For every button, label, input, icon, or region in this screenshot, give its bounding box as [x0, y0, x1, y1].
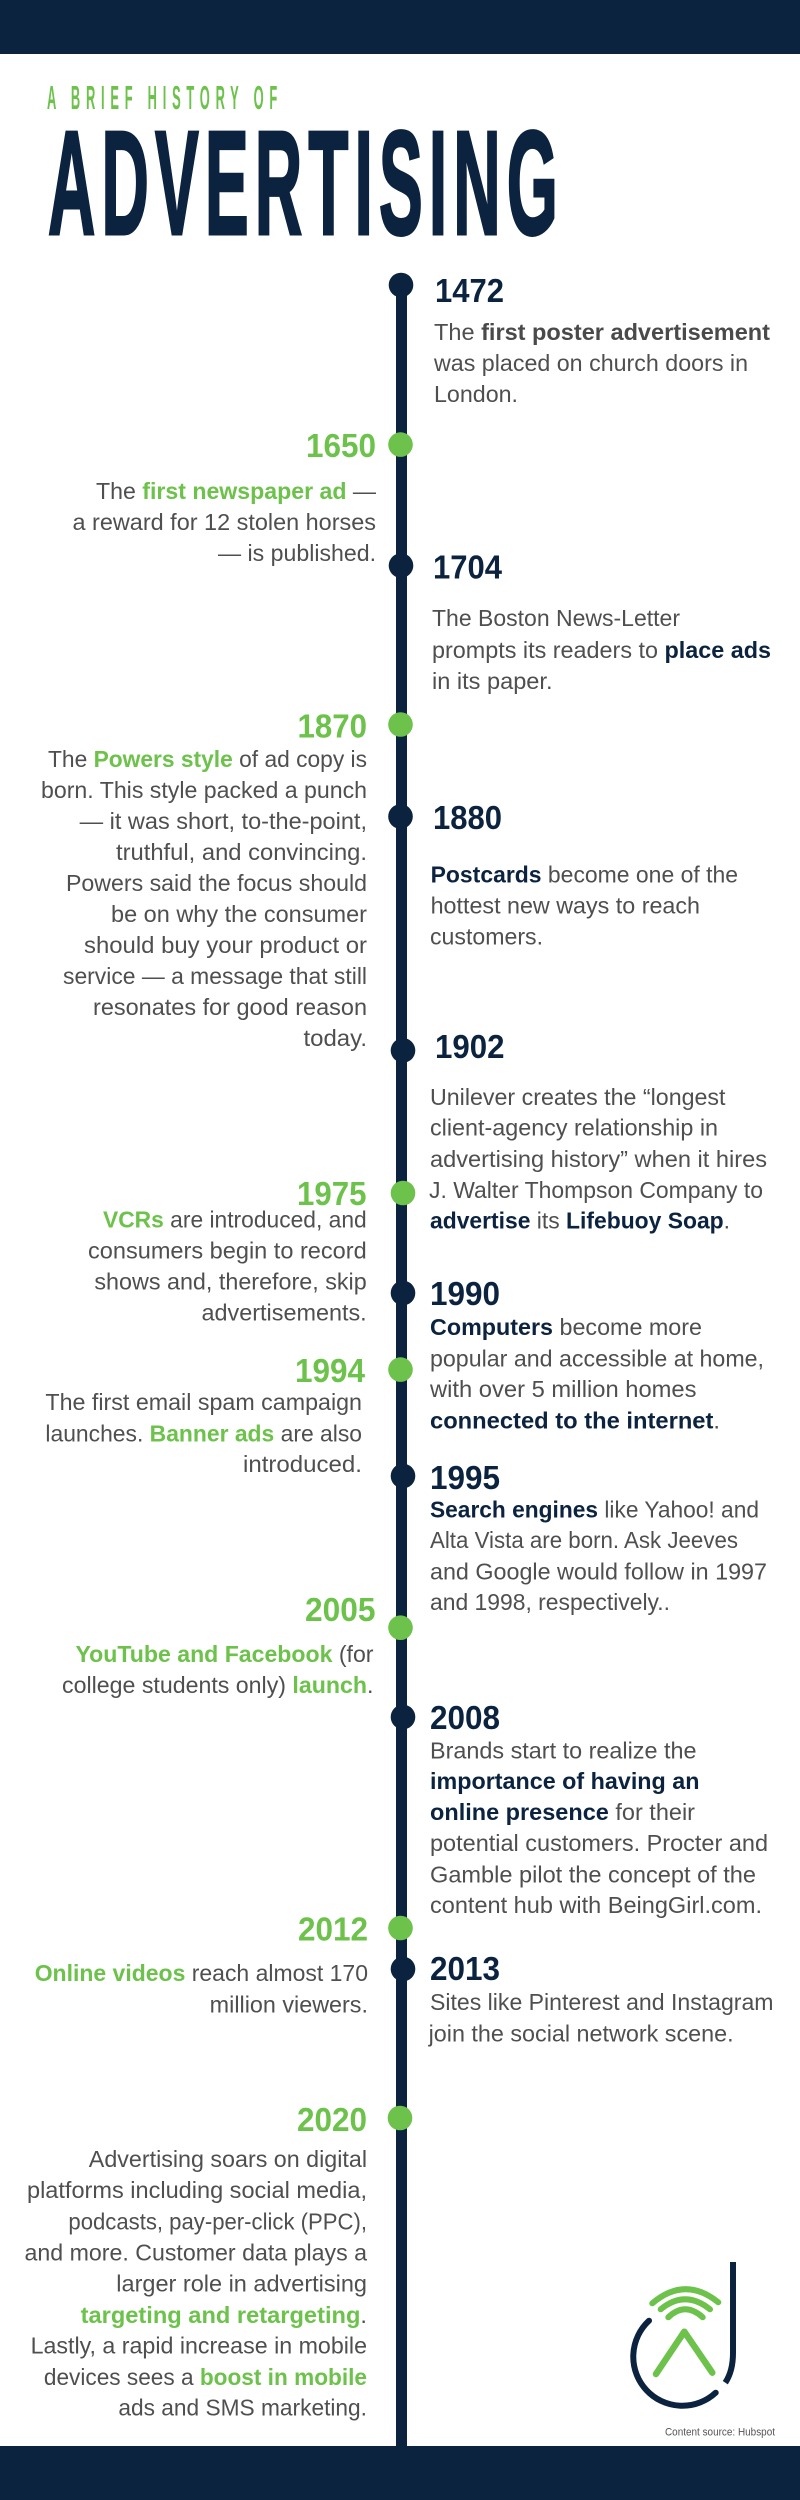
text: 1472: [433, 319, 770, 407]
text: 1704: The Boston News-Letter: [432, 605, 680, 631]
text: 1902: advertising history” when it hires: [430, 1146, 767, 1172]
marker: 1975: [391, 1181, 415, 1205]
text: 1870: The Powers style of ad copy is: [48, 746, 367, 772]
text: 2008: content hub with BeingGirl.com.: [430, 1892, 762, 1918]
marker: 2013: [391, 1957, 415, 1981]
text: 1995: and 1998, respectively..: [430, 1589, 670, 1615]
year: 1995: 1995: [430, 1459, 500, 1496]
text: 1870: today.: [304, 1025, 367, 1051]
text: 1990: popular and accessible at home,: [430, 1346, 764, 1372]
text: 1650: — is published.: [218, 540, 376, 566]
text: 1975: consumers begin to record: [88, 1238, 367, 1264]
text: 2020: [24, 2146, 367, 2421]
text: 2008: [430, 1738, 768, 1918]
text: 1870: should buy your product or: [84, 932, 367, 958]
text: 1870: born. This style packed a punch: [41, 777, 367, 803]
timeline entry: 1650: [72, 427, 413, 566]
text: 1902: J. Walter Thompson Company to: [429, 1177, 763, 1203]
marker: 1880: [388, 804, 413, 829]
timeline entry: 1880: [388, 799, 738, 950]
text: 1472: London.: [434, 381, 518, 407]
year: 1902: 1902: [435, 1028, 504, 1065]
text: 2013: [428, 1989, 774, 2046]
marker: 1704: [389, 553, 413, 578]
text: 2012: Online videos reach almost 170: [35, 1960, 368, 1986]
marker: 1650: [388, 432, 413, 457]
text: 2012: [35, 1960, 368, 2018]
year: 1994: 1994: [295, 1352, 366, 1389]
text: 2020: larger role in advertising: [116, 2270, 367, 2296]
timeline entry: 1902: [391, 1028, 767, 1234]
marker: 1870: [388, 712, 413, 737]
text: 1990: connected to the internet .: [430, 1408, 720, 1434]
text: 2020: and more. Customer data plays a: [24, 2240, 367, 2266]
text: 1870: Powers said the focus should: [66, 870, 367, 896]
text: 1994: The first email spam campaign: [45, 1389, 362, 1415]
text: 2013: Sites like Pinterest and Instagram: [430, 1989, 774, 2015]
timeline entry: 1472: [389, 272, 770, 407]
top band: [0, 0, 800, 54]
year: 1880: 1880: [433, 799, 502, 836]
text: 2013: join the social network scene.: [428, 2020, 734, 2046]
year: 1472: 1472: [435, 272, 504, 309]
marker: 1902: [391, 1038, 415, 1063]
text: 1870: resonates for good reason: [93, 994, 367, 1020]
text: 2008: online presence for their: [430, 1799, 695, 1825]
text: 1995: Search engines like Yahoo! and: [430, 1496, 759, 1522]
text: A BRIEF HISTORY OF: [47, 80, 283, 117]
text: 1650: The first newspaper ad —: [96, 478, 376, 504]
year: 2005: 2005: [305, 1591, 376, 1628]
text: 1995: [430, 1496, 767, 1615]
bottom band: [0, 2446, 800, 2500]
text: 1880: Postcards become one of the: [431, 862, 738, 888]
text: 1902: client-agency relationship in: [430, 1115, 718, 1141]
source credit: Content source: Hubspot: [665, 2427, 775, 2439]
text: 1880: customers.: [430, 924, 543, 950]
text: 2020: Lastly, a rapid increase in mobile: [31, 2333, 367, 2359]
text: 1990: Computers become more: [430, 1314, 702, 1340]
timeline entry: 2005: [62, 1591, 413, 1698]
timeline entry: 1995: [391, 1459, 767, 1615]
text: 2020: targeting and retargeting .: [81, 2302, 367, 2328]
marker: 2020: [388, 2106, 412, 2130]
marker: 1995: [391, 1464, 415, 1488]
text: 1994: launches. Banner ads are also: [45, 1420, 362, 1446]
timeline entry: 1975: [88, 1175, 415, 1326]
text: 1880: hottest new ways to reach: [431, 892, 700, 918]
timeline spine: [396, 285, 407, 2446]
text: 1704: prompts its readers to place ads: [432, 637, 771, 663]
year: 1870: 1870: [298, 708, 367, 744]
text: 2008: Gamble pilot the concept of the: [430, 1862, 756, 1888]
marker: 2012: [388, 1916, 413, 1940]
text: 1472: The first poster advertisement: [434, 319, 770, 345]
year: 2020: 2020: [297, 2101, 367, 2138]
text: 1902: Unilever creates the “longest: [430, 1084, 726, 1110]
text: 2005: YouTube and Facebook (for: [76, 1641, 374, 1667]
text: 1870: truthful, and convincing.: [116, 839, 367, 865]
text: 1650: [72, 478, 376, 566]
text: 1902: advertise its Lifebuoy Soap.: [430, 1208, 730, 1234]
timeline entry: 2012: [35, 1911, 413, 2018]
text: 2020: Advertising soars on digital: [89, 2146, 367, 2172]
text: 1704: [432, 605, 771, 694]
logo: [633, 2262, 733, 2406]
text: 1880: [430, 862, 738, 950]
text: 1870: be on why the consumer: [111, 901, 367, 927]
text: 1704: in its paper.: [432, 668, 552, 694]
year: 1990: 1990: [430, 1275, 500, 1312]
year: 2012: 2012: [298, 1911, 368, 1948]
text: 2020: ads and SMS marketing.: [118, 2395, 367, 2421]
marker: 1472: [389, 273, 413, 297]
text: 1975: VCRs are introduced, and: [103, 1207, 367, 1233]
text: 1650: a reward for 12 stolen horses: [72, 509, 376, 535]
timeline entry: 2020: [24, 2101, 412, 2421]
text: 1870: — it was short, to-the-point,: [80, 808, 367, 834]
text: 2020: devices sees a boost in mobile: [44, 2364, 367, 2390]
text: 2005: college students only) launch.: [62, 1672, 374, 1698]
text: 1995: Alta Vista are born. Ask Jeeves: [430, 1527, 738, 1553]
year: 1704: 1704: [433, 549, 503, 586]
text: 1990: [429, 1314, 764, 1434]
marker: 1994: [388, 1357, 413, 1382]
text: 1995: and Google would follow in 1997: [430, 1558, 767, 1584]
text: 2012: million viewers.: [210, 1992, 368, 2018]
timeline entry: 1994: [45, 1352, 413, 1477]
text: 2020: platforms including social media,: [27, 2177, 367, 2203]
text: 1870: service — a message that still: [63, 963, 367, 989]
year: 2008: 2008: [430, 1699, 500, 1736]
text: 2008: potential customers. Procter and: [430, 1830, 768, 1856]
timeline entry: 2008: [391, 1699, 768, 1918]
text: 1975: [88, 1207, 367, 1326]
marker: 2005: [388, 1615, 413, 1640]
text: 1870: [41, 746, 367, 1051]
timeline entry: 2013: [391, 1950, 774, 2046]
marker: 1990: [391, 1281, 415, 1305]
text: 1902: [429, 1084, 767, 1234]
marker: 2008: [391, 1705, 415, 1729]
year: 2013: 2013: [430, 1950, 500, 1987]
year: 1650: 1650: [306, 427, 376, 464]
text: 1994: [45, 1389, 362, 1477]
text: 2008: importance of having an: [430, 1768, 700, 1794]
year: 1975: 1975: [297, 1175, 366, 1212]
text: 1975: advertisements.: [202, 1300, 367, 1326]
text: 2020: podcasts, pay-per-click (PPC),: [68, 2208, 367, 2234]
text: 1990: with over 5 million homes: [429, 1376, 696, 1402]
text: 1472: was placed on church doors in: [433, 350, 748, 376]
timeline entry: 1704: [389, 549, 771, 694]
text: 2008: Brands start to realize the: [430, 1738, 696, 1764]
text: 1975: shows and, therefore, skip: [94, 1269, 367, 1295]
text: 1994: introduced.: [243, 1451, 362, 1477]
timeline entry: 1870: [41, 708, 413, 1051]
timeline entry: 1990: [391, 1275, 764, 1434]
text: 2005: [62, 1641, 374, 1698]
